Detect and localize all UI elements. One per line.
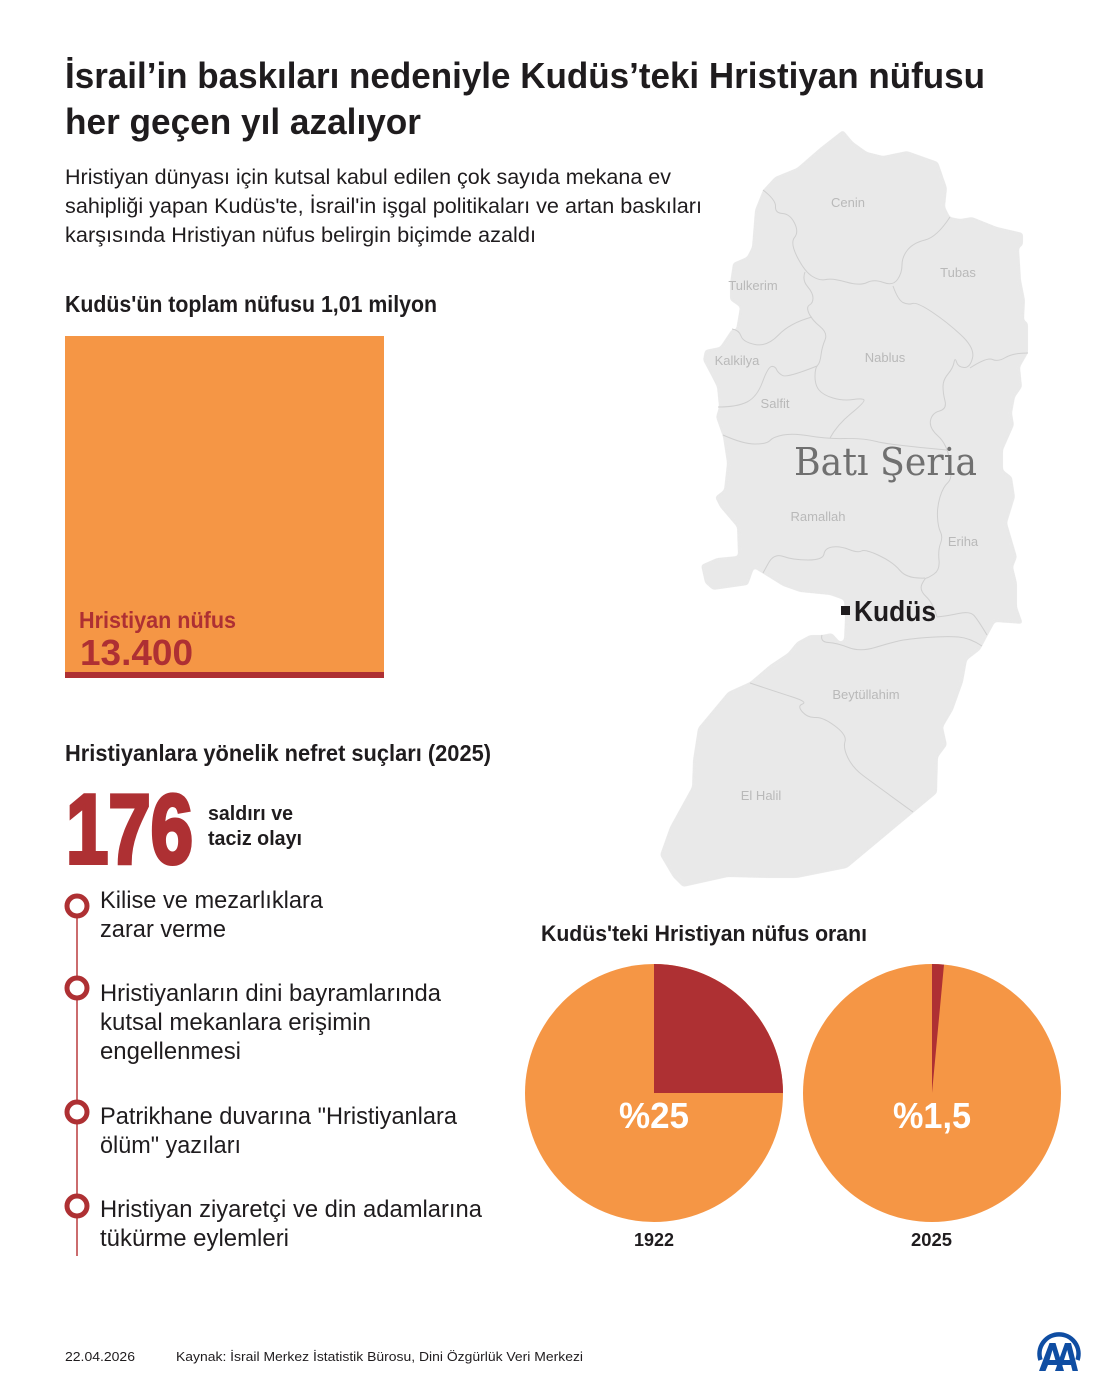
intro text: Hristiyan dünyası için kutsal kabul edilen çok sayıda mekana ev bbox=[65, 166, 672, 189]
proportional square chart: 13.400 bbox=[80, 632, 193, 673]
marker: Kudüs: Kudüs bbox=[854, 596, 936, 628]
district labels bbox=[715, 195, 979, 803]
item 3 bbox=[67, 1102, 458, 1159]
timeline list bbox=[67, 887, 483, 1256]
big number: 176: 176 bbox=[66, 774, 193, 884]
item 4: tükürme eylemleri bbox=[100, 1225, 289, 1252]
title: her geçen yıl azalıyor bbox=[65, 101, 421, 142]
pie chart: 1922: %25 bbox=[619, 1095, 689, 1136]
pie chart: 1922 bbox=[525, 964, 783, 1250]
heading: total population: Kudüs'ün toplam nüfusu 1,01 milyon bbox=[65, 291, 437, 317]
intro text bbox=[65, 166, 702, 247]
footer source: Kaynak: İsrail Merkez İstatistik Bürosu, Dini Özgürlük Veri Merkezi bbox=[176, 1349, 583, 1364]
big number: 176: saldırı ve bbox=[208, 803, 293, 825]
item 4 bbox=[67, 1196, 483, 1252]
big number: 176: taciz olayı bbox=[208, 828, 302, 850]
district labels: El Halil bbox=[741, 788, 781, 803]
district labels: Ramallah bbox=[791, 509, 845, 524]
title bbox=[65, 55, 985, 142]
heading: pie charts: Kudüs'teki Hristiyan nüfus oranı bbox=[541, 921, 867, 946]
icon: AA logo bbox=[1039, 1334, 1078, 1371]
item 3: Patrikhane duvarına "Hristiyanlara bbox=[100, 1103, 458, 1130]
pie chart: 1922: 1922 bbox=[634, 1230, 674, 1250]
district labels: Eriha bbox=[948, 534, 979, 549]
big number: 176 bbox=[66, 774, 302, 884]
item 1 bbox=[67, 887, 324, 943]
item 2: kutsal mekanlara erişimin bbox=[100, 1009, 371, 1036]
district labels: Tubas bbox=[940, 265, 976, 280]
heading: hate crimes: Hristiyanlara yönelik nefret suçları (2025) bbox=[65, 740, 491, 766]
item 4: Hristiyan ziyaretçi ve din adamlarına bbox=[100, 1196, 483, 1223]
map: West Bank bbox=[660, 130, 1028, 887]
district labels: Beytüllahim bbox=[832, 687, 900, 702]
district labels: Nablus bbox=[865, 350, 906, 365]
proportional square chart bbox=[65, 336, 384, 678]
item 3: ölüm" yazıları bbox=[100, 1132, 241, 1159]
item 2: engellenmesi bbox=[100, 1038, 241, 1065]
item 1: zarar verme bbox=[100, 916, 226, 943]
district labels: Kalkilya bbox=[715, 353, 760, 368]
intro text: sahipliği yapan Kudüs'te, İsrail'in işgal politikaları ve artan baskıları bbox=[65, 195, 702, 218]
district labels: Tulkerim bbox=[728, 278, 778, 293]
footer date: 22.04.2026 bbox=[65, 1349, 135, 1364]
district labels: Cenin bbox=[831, 195, 865, 210]
district labels: Salfit bbox=[761, 396, 790, 411]
intro text: karşısında Hristiyan nüfus belirgin biçimde azaldı bbox=[65, 224, 536, 247]
item 2: Hristiyanların dini bayramlarında bbox=[100, 980, 442, 1007]
pie chart: 2025: %1,5 bbox=[893, 1095, 971, 1136]
map outline bbox=[660, 130, 1028, 887]
title: İsrail’in baskıları nedeniyle Kudüs’teki Hristiyan nüfusu bbox=[65, 55, 985, 96]
pie chart: 2025: 2025 bbox=[911, 1230, 952, 1250]
district borders bbox=[718, 190, 1028, 812]
item 1: Kilise ve mezarlıklara bbox=[100, 887, 324, 914]
pie chart: 2025 bbox=[803, 964, 1061, 1250]
item 2 bbox=[67, 978, 442, 1065]
region label: Batı Şeria bbox=[794, 440, 977, 484]
proportional square chart: Hristiyan nüfus bbox=[79, 607, 236, 633]
